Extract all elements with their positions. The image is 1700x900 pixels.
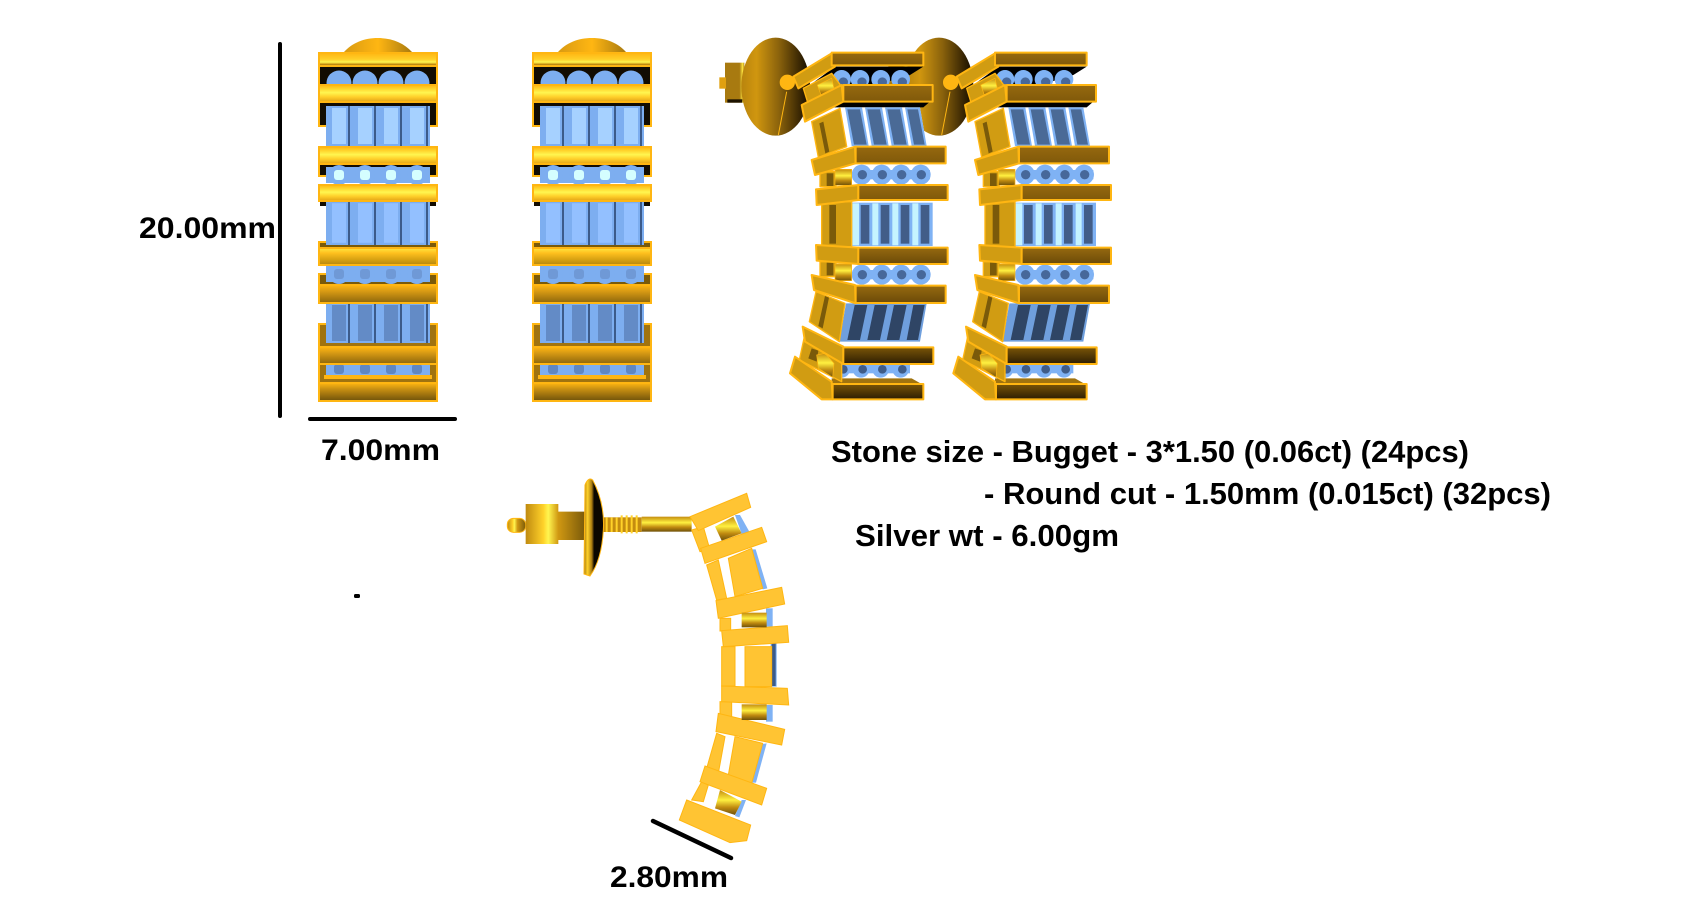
round stones row 1 [326, 70, 430, 96]
black setting, middle [319, 160, 437, 176]
baguette stones row 3 [839, 303, 927, 342]
front earring, right [533, 38, 651, 401]
round stones row 3 [326, 264, 430, 284]
baguette stones row 2 [852, 203, 933, 246]
round stones row 4 [833, 361, 910, 378]
black setting, top [319, 60, 437, 126]
stud dome [344, 38, 412, 52]
yellow frame [679, 493, 789, 843]
stone size, round cut: - Round cut - 1.50mm (0.015ct) (32pcs) [984, 476, 1551, 511]
brown corners above band 5 [319, 242, 437, 252]
three-quarter view earring, left [719, 38, 948, 399]
width dimension line [308, 417, 457, 421]
round stones row 2 [852, 165, 931, 185]
silver weight: Silver wt - 6.00gm [855, 518, 1119, 553]
baguette stones row 2 [326, 201, 430, 245]
baguette stones row 3 [326, 303, 430, 343]
three-quarter view earring, right [944, 53, 1111, 399]
stone edges [735, 515, 777, 817]
round stones row 2 [326, 165, 430, 185]
baguette stones row 1 [326, 106, 430, 146]
band ends, angled [781, 53, 858, 399]
brown slits in side frame [808, 122, 836, 362]
gold connector cylinders [715, 517, 767, 815]
black gap behind top stones [810, 67, 923, 85]
gold strip under round stones [324, 375, 432, 379]
ear disk [584, 479, 604, 576]
small gold cylinders [817, 78, 852, 377]
side frame backing [799, 73, 852, 382]
gold band 2 [319, 85, 437, 102]
stone size, baguette: Stone size - Bugget - 3*1.50 (0.06ct) (24pcs) [831, 434, 1469, 469]
screw post [603, 515, 692, 533]
gold band 5 [319, 248, 437, 265]
round stones row 1 [832, 70, 910, 89]
height dimension line [278, 42, 282, 418]
front earring, left [319, 38, 437, 401]
side view earring [507, 479, 789, 843]
brown block, bottom [319, 324, 437, 400]
brown setting above band 6 [319, 274, 437, 294]
butterfly back nut [507, 504, 585, 544]
bottom brown ledge [832, 378, 923, 385]
gold band 3 [319, 147, 437, 164]
gold band 1 [319, 53, 437, 66]
gold band 6 [319, 285, 437, 303]
specification text [831, 434, 1551, 553]
earring body [781, 53, 948, 399]
stud, left earring [719, 38, 810, 136]
depth label: 2.80mm [610, 861, 728, 894]
gold band 7 [319, 347, 437, 364]
front bands [832, 53, 948, 399]
stray dot [354, 594, 360, 598]
black gap under band 2 [813, 102, 930, 107]
gold band 8 [319, 383, 437, 401]
round stones row 4 [326, 359, 430, 379]
round stones row 3 [852, 265, 931, 285]
width label: 7.00mm [321, 434, 440, 467]
black corners under band 4 [320, 200, 436, 206]
dark stone edge, centre [772, 643, 776, 686]
baguette stones row 1 [840, 107, 927, 146]
three-quarter view stud, right earring [883, 38, 973, 136]
gold band 4 [319, 185, 437, 201]
height label: 20.00mm [139, 212, 276, 245]
depth dimension line [653, 821, 731, 858]
